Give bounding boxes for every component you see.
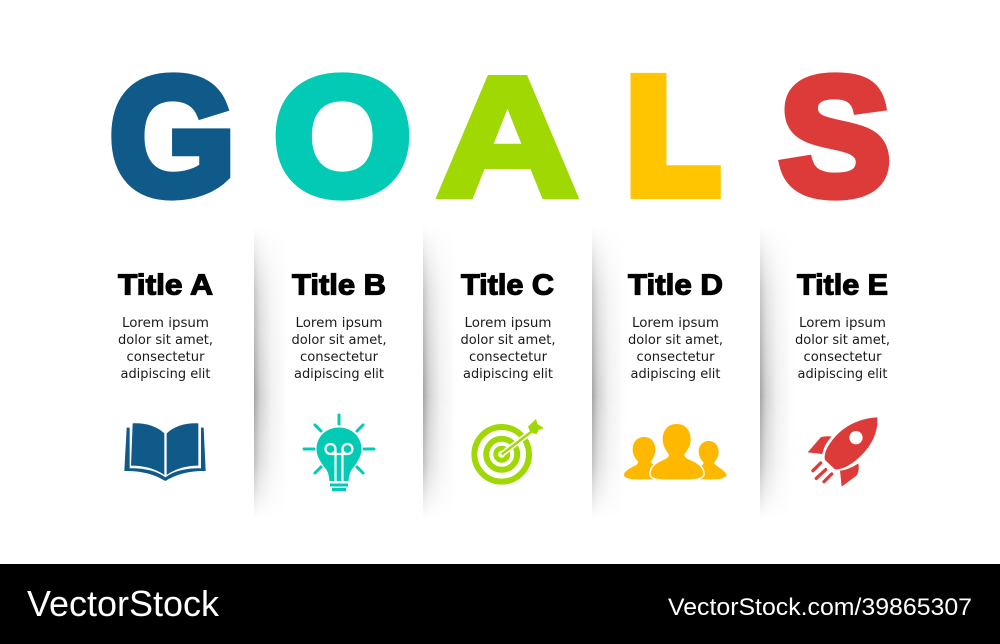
body text: Lorem ipsum (799, 316, 886, 331)
title: Title A (118, 270, 213, 302)
body text: Lorem ipsum (296, 316, 382, 331)
panel: Title B (292, 270, 386, 491)
body text (795, 316, 890, 382)
panel: Title C (460, 270, 556, 482)
panel: Title D (624, 270, 727, 479)
body text: Lorem ipsum (632, 316, 719, 331)
body text: dolor sit amet, (460, 333, 556, 348)
body text: adipiscing elit (630, 367, 720, 382)
footer bar (0, 564, 1000, 644)
footer url: VectorStock.com/39865307 (668, 594, 972, 621)
title: Title E (797, 270, 888, 302)
body text: adipiscing elit (294, 367, 384, 382)
body text: dolor sit amet, (628, 333, 723, 348)
icon: group of people (624, 424, 727, 479)
body text: dolor sit amet, (795, 333, 890, 348)
body text: consectetur (469, 350, 548, 365)
title: Title D (628, 270, 723, 302)
panel: Title A (118, 270, 213, 481)
heading: GOALS (109, 42, 891, 232)
body text: adipiscing elit (120, 367, 210, 382)
letter S: S (779, 44, 891, 230)
title: Title C (461, 270, 554, 302)
icon: open book (124, 423, 206, 481)
body text: consectetur (636, 350, 715, 365)
panel: Title E (795, 270, 890, 487)
icon: target with arrow (474, 419, 544, 482)
body text: consectetur (300, 350, 379, 365)
body text: consectetur (804, 350, 882, 365)
letter A: A (436, 42, 579, 232)
letter O: O (274, 44, 411, 230)
body text: consectetur (126, 350, 205, 365)
body text (292, 316, 386, 382)
icon: rocket (808, 417, 877, 487)
body text: adipiscing elit (798, 367, 888, 382)
title: Title B (292, 270, 386, 302)
footer brand: VectorStock (27, 583, 220, 624)
body text (460, 316, 556, 382)
letter L: L (628, 46, 718, 225)
body text: dolor sit amet, (118, 333, 213, 348)
body text (118, 316, 213, 382)
letter G: G (109, 43, 236, 230)
body text: dolor sit amet, (292, 333, 386, 348)
body text (628, 316, 723, 382)
icon: light bulb (304, 415, 374, 491)
body text: Lorem ipsum (464, 316, 552, 331)
body text: adipiscing elit (463, 367, 553, 382)
body text: Lorem ipsum (122, 316, 209, 331)
